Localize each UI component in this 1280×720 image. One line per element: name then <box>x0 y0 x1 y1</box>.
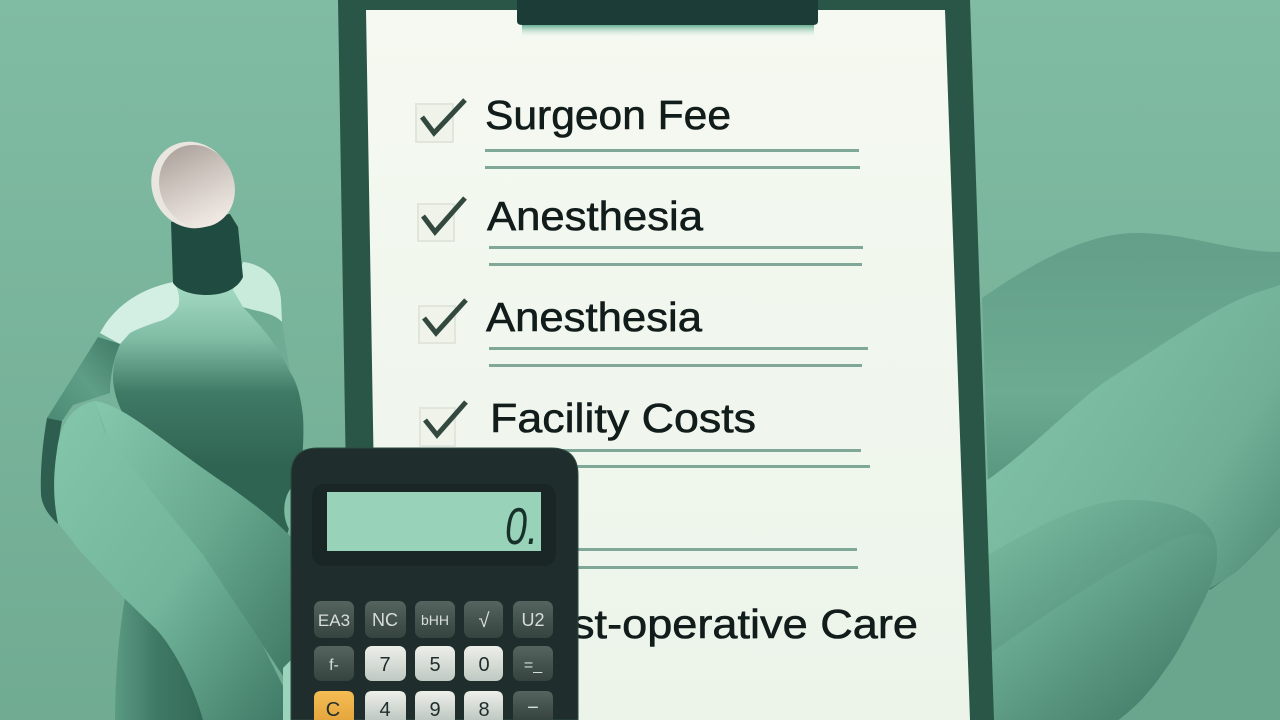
clipboard: board <box>338 0 994 720</box>
calculator: body <box>291 448 578 720</box>
figure: right shoulder <box>233 262 282 322</box>
key row 2: =_ <box>524 657 543 674</box>
key row 2 <box>314 646 553 681</box>
calculator <box>291 448 578 720</box>
figure: torso <box>113 285 303 535</box>
item: Anesthesia <box>418 193 863 266</box>
figure: calculator-side bump <box>284 488 291 532</box>
item: Anesthesia: Anesthesia <box>487 193 703 239</box>
item: Surgeon Fee <box>416 92 860 169</box>
figure: lower body <box>115 597 220 720</box>
key row 2: f- <box>329 657 339 674</box>
calculator: keypad <box>314 601 553 720</box>
leaf: middle <box>986 285 1280 720</box>
key row 2: 5 <box>429 654 441 676</box>
clipboard: clip <box>517 0 818 25</box>
key row 1 <box>314 601 553 638</box>
calculator: display <box>312 484 556 566</box>
key row 1: U2 <box>521 610 545 630</box>
clipboard: clip shadow <box>522 24 814 38</box>
decorative leaves <box>982 233 1280 720</box>
item: Facility Costs: Facility Costs <box>490 395 756 441</box>
key row 3 <box>314 691 553 720</box>
leaf: front lower <box>992 534 1217 720</box>
item: blank lines <box>570 548 858 569</box>
item: Surgeon Fee: Surgeon Fee <box>485 92 731 138</box>
figure: lower leg <box>54 401 285 720</box>
figure: elbow <box>41 418 62 524</box>
key row 1: bHH <box>421 612 449 628</box>
figure: upper arm <box>47 337 120 421</box>
figure holding a mirror <box>41 128 303 720</box>
key row 2: 0 <box>478 654 490 676</box>
clipboard <box>338 0 994 720</box>
key row 1: EA3 <box>318 611 350 630</box>
key row 3: − <box>527 697 539 719</box>
figure: left shoulder <box>100 282 179 344</box>
key row 1: √ <box>479 610 490 632</box>
key row 2: 7 <box>379 654 391 676</box>
figure: mirror disc <box>137 128 248 242</box>
figure: neck <box>171 214 243 295</box>
figure: hip sliver <box>283 660 291 720</box>
checklist <box>416 92 918 647</box>
leaf: front upper <box>988 500 1217 660</box>
clipboard: paper sheet <box>366 10 970 720</box>
leaf: lower right background <box>1120 527 1280 720</box>
calculator: display: 0. <box>505 498 538 556</box>
item: Anesthesia repeated <box>419 294 868 367</box>
key row 1: NC <box>372 610 398 630</box>
item: Facility Costs <box>420 395 870 468</box>
figure: upper leg <box>95 401 291 700</box>
item: Post-operative Care: st-operative Care <box>572 601 918 647</box>
leaf: back <box>982 233 1280 590</box>
figure: right strap <box>243 307 290 372</box>
item: Anesthesia repeated: Anesthesia <box>486 294 702 340</box>
